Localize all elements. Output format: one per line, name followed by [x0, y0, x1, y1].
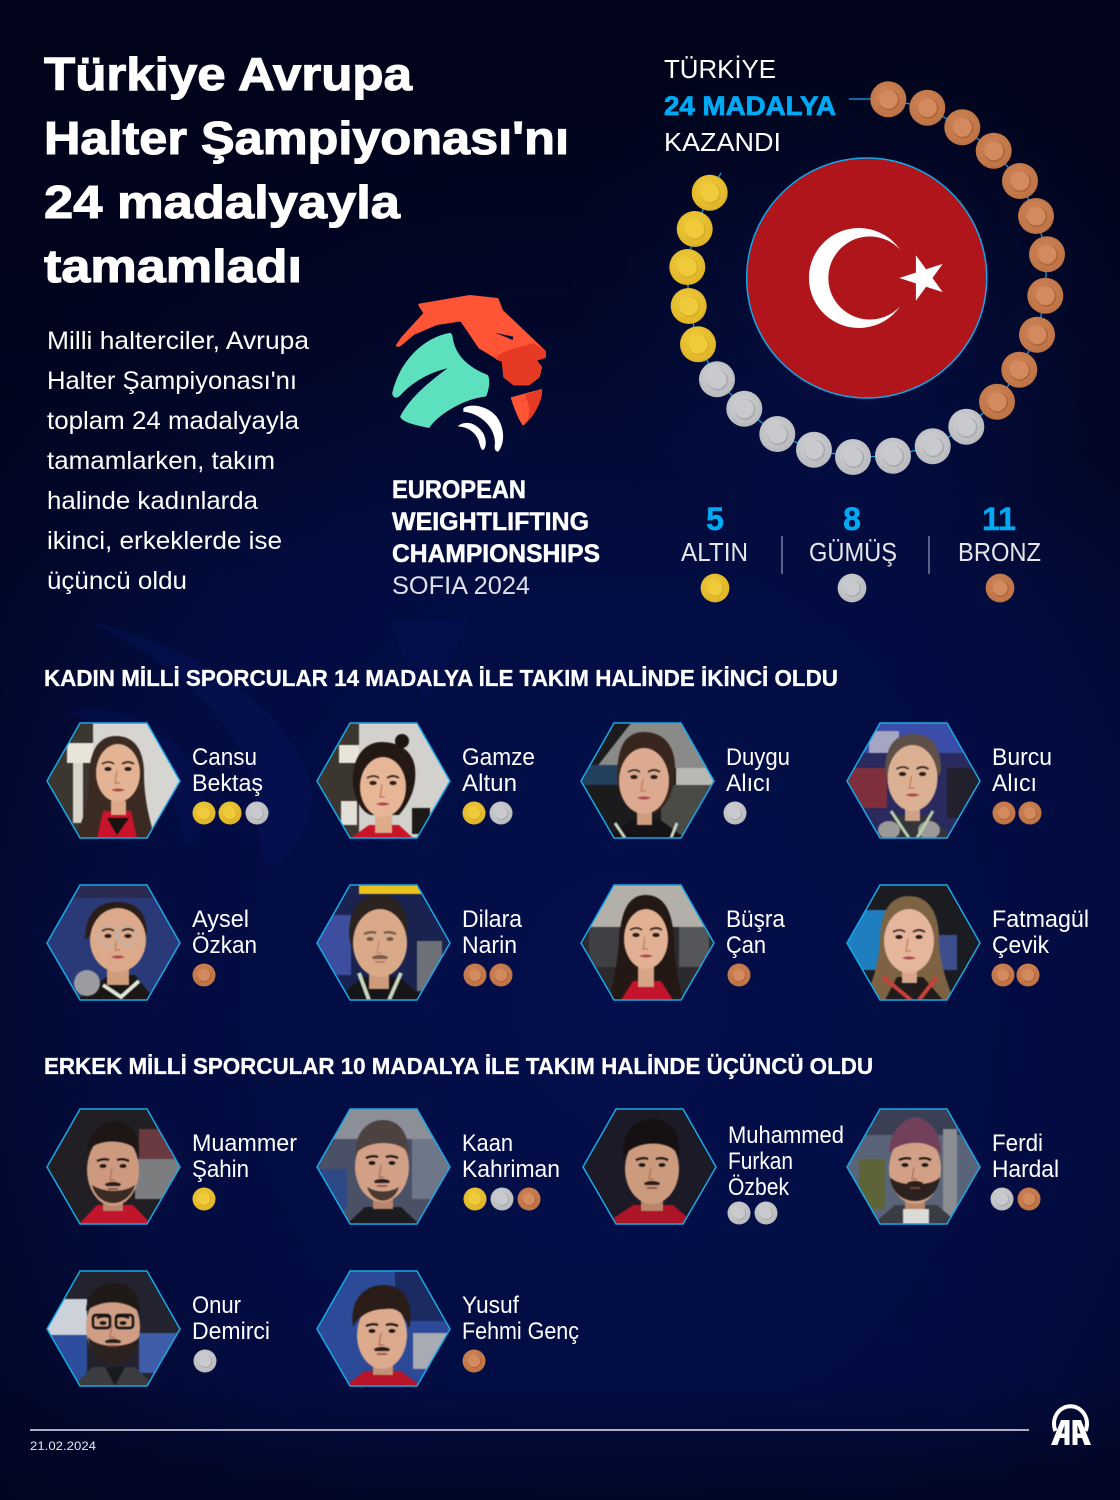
athlete: Muammer Şahin: Şahin [192, 1156, 249, 1183]
intro text: Halter Şampiyonası'nı [47, 367, 297, 395]
title: 24 madalyayla [44, 176, 400, 228]
stat: bronze: 11 [982, 501, 1016, 537]
athlete: Muhammed Furkan Özbek: Muhammed [728, 1122, 844, 1149]
athlete: Onur Demirci [47, 1271, 270, 1386]
athlete: Onur Demirci: Onur [192, 1292, 241, 1319]
intro text [47, 327, 309, 595]
athlete: Ferdi Hardal: Ferdi [992, 1130, 1043, 1157]
heading: 24 madalya: TÜRKİYE [664, 54, 776, 84]
athlete: Cansu Bektaş [47, 723, 269, 838]
heading: 24 madalya: KAZANDI [664, 127, 781, 157]
icon: Turkish flag circle [747, 158, 987, 398]
logo text: European Weightlifting Championships Sofia 2024 [392, 476, 600, 600]
athlete: Aysel Özkan: Özkan [192, 932, 257, 959]
athlete: Kaan Kahriman [317, 1109, 560, 1224]
intro text: ikinci, erkeklerde ise [47, 527, 282, 555]
athlete: Büşra Çan: Çan [726, 932, 766, 959]
icon: championship lion logo [393, 296, 545, 452]
athlete: Muhammed Furkan Özbek: Özbek [728, 1174, 790, 1201]
medal ring: gold [669, 175, 728, 362]
athlete: Duygu Alıcı: Duygu [726, 744, 790, 771]
athlete: Dilara Narin [317, 885, 523, 1000]
stat: bronze: BRONZ [958, 537, 1041, 567]
title: Türkiye Avrupa [44, 48, 412, 100]
medal ring connecting line [687, 99, 1047, 457]
intro text: üçüncü oldu [47, 567, 187, 595]
athlete: Gamze Altun: Gamze [462, 744, 535, 771]
logo text: European Weightlifting Championships Sofia 2024: CHAMPIONSHIPS [392, 540, 600, 568]
athlete: Kaan Kahriman: Kahriman [462, 1156, 560, 1183]
athlete: Dilara Narin: Narin [462, 932, 517, 959]
stat: gold: ALTIN [681, 537, 748, 567]
athlete: Fatmagül Çevik [847, 885, 1089, 1000]
athlete: Duygu Alıcı [581, 723, 790, 838]
athlete: Cansu Bektaş: Cansu [192, 744, 257, 771]
stat: bronze [958, 501, 1041, 602]
athlete: Burcu Alıcı: Burcu [992, 744, 1052, 771]
logo text: European Weightlifting Championships Sofia 2024: EUROPEAN [392, 476, 526, 504]
athlete: Gamze Altun [317, 723, 535, 838]
icon: AA logo [1051, 1406, 1091, 1445]
heading: 24 madalya [664, 54, 836, 157]
heading: men: ERKEK MİLLİ SPORCULAR 10 MADALYA İLE TAKIM HALİNDE ÜÇÜNCÜ OLDU [44, 1053, 873, 1079]
logo text: European Weightlifting Championships Sofia 2024: WEIGHTLIFTING [392, 508, 589, 536]
athlete: Kaan Kahriman: Kaan [462, 1130, 513, 1157]
intro text: halinde kadınlarda [47, 487, 258, 515]
athlete: Yusuf Fehmi Genç: Fehmi Genç [462, 1318, 579, 1345]
athlete: Duygu Alıcı: Alıcı [726, 770, 771, 797]
athlete: Yusuf Fehmi Genç [317, 1271, 579, 1386]
athlete: Fatmagül Çevik: Fatmagül [992, 906, 1089, 933]
stat: silver: 8 [843, 501, 861, 537]
athlete: Muhammed Furkan Özbek [583, 1109, 844, 1225]
athlete: Burcu Alıcı: Alıcı [992, 770, 1037, 797]
heading: 24 madalya: 24 MADALYA [664, 91, 836, 121]
athlete: Burcu Alıcı [847, 723, 1052, 839]
athlete: Yusuf Fehmi Genç: Yusuf [462, 1292, 519, 1319]
date: 21.02.2024 [30, 1439, 96, 1453]
athlete: Cansu Bektaş: Bektaş [192, 770, 263, 797]
athlete: Ferdi Hardal: Hardal [992, 1156, 1059, 1183]
athlete: Dilara Narin: Dilara [462, 906, 523, 933]
medal ring: silver [699, 361, 984, 475]
athlete: Muhammed Furkan Özbek: Furkan [728, 1148, 793, 1175]
intro text: Milli halterciler, Avrupa [47, 327, 309, 355]
intro text: tamamlarken, takım [47, 447, 275, 475]
athlete: Onur Demirci: Demirci [192, 1318, 270, 1345]
athlete: Muammer Şahin [47, 1109, 297, 1224]
athlete: Fatmagül Çevik: Çevik [992, 932, 1050, 959]
title [44, 48, 569, 292]
athlete: Aysel Özkan: Aysel [192, 906, 249, 933]
title: Halter Şampiyonası'nı [44, 112, 569, 164]
intro text: toplam 24 madalyayla [47, 407, 299, 435]
heading: women: KADIN MİLLİ SPORCULAR 14 MADALYA İLE TAKIM HALİNDE İKİNCİ OLDU [44, 665, 838, 691]
athlete: Büşra Çan [581, 885, 786, 1000]
athlete: Büşra Çan: Büşra [726, 906, 786, 933]
title: tamamladı [44, 240, 302, 292]
stat: gold: 5 [706, 501, 724, 537]
stat: gold [681, 501, 748, 602]
athlete: Muammer Şahin: Muammer [192, 1130, 297, 1157]
athlete: Ferdi Hardal [847, 1109, 1059, 1224]
stat: silver: GÜMÜŞ [809, 537, 897, 567]
athlete: Aysel Özkan [47, 885, 257, 1000]
logo text: European Weightlifting Championships Sofia 2024: SOFIA 2024 [392, 572, 530, 600]
stat: silver [809, 501, 897, 602]
athlete: Gamze Altun: Altun [462, 770, 517, 797]
medal ring: bronze [870, 81, 1065, 420]
